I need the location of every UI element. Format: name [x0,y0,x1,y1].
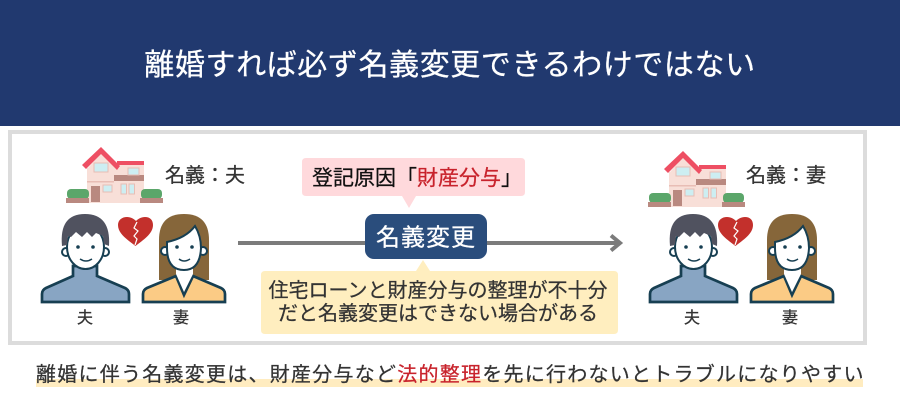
arrow [238,236,620,250]
icon: wife left [143,214,225,302]
summary line with highlight: 離婚に伴う名義変更は、財産分与など法的整理を先に行わないとトラブルになりやすい [36,362,865,386]
icon: husband left [42,214,129,302]
callout: registration cause: 登記原因「財産分与」 [312,167,522,190]
box: title change [365,214,487,259]
callout: registration cause [302,158,525,208]
icon: broken heart left [118,217,153,246]
label: wife right: 妻 [782,309,798,327]
callout: warning note [261,260,618,334]
icon: wife right [751,214,833,302]
callout: warning note: 住宅ローンと財産分与の整理が不十分 [268,279,608,302]
icon: husband right [650,214,737,302]
callout: warning note: だと名義変更はできない場合がある [278,302,598,325]
icon: broken heart right [718,217,753,246]
label: owner husband: 名義：夫 [165,164,245,187]
label: wife left: 妻 [173,309,189,327]
title: 離婚すれば必ず名義変更できるわけではない [144,49,756,82]
icon: house right [648,151,745,207]
label: husband right: 夫 [684,309,700,327]
label: husband left: 夫 [77,309,93,327]
panel: title transfer diagram [10,132,865,343]
box: title change: 名義変更 [376,224,476,252]
icon: house left [66,147,163,203]
label: owner wife: 名義：妻 [746,164,826,187]
